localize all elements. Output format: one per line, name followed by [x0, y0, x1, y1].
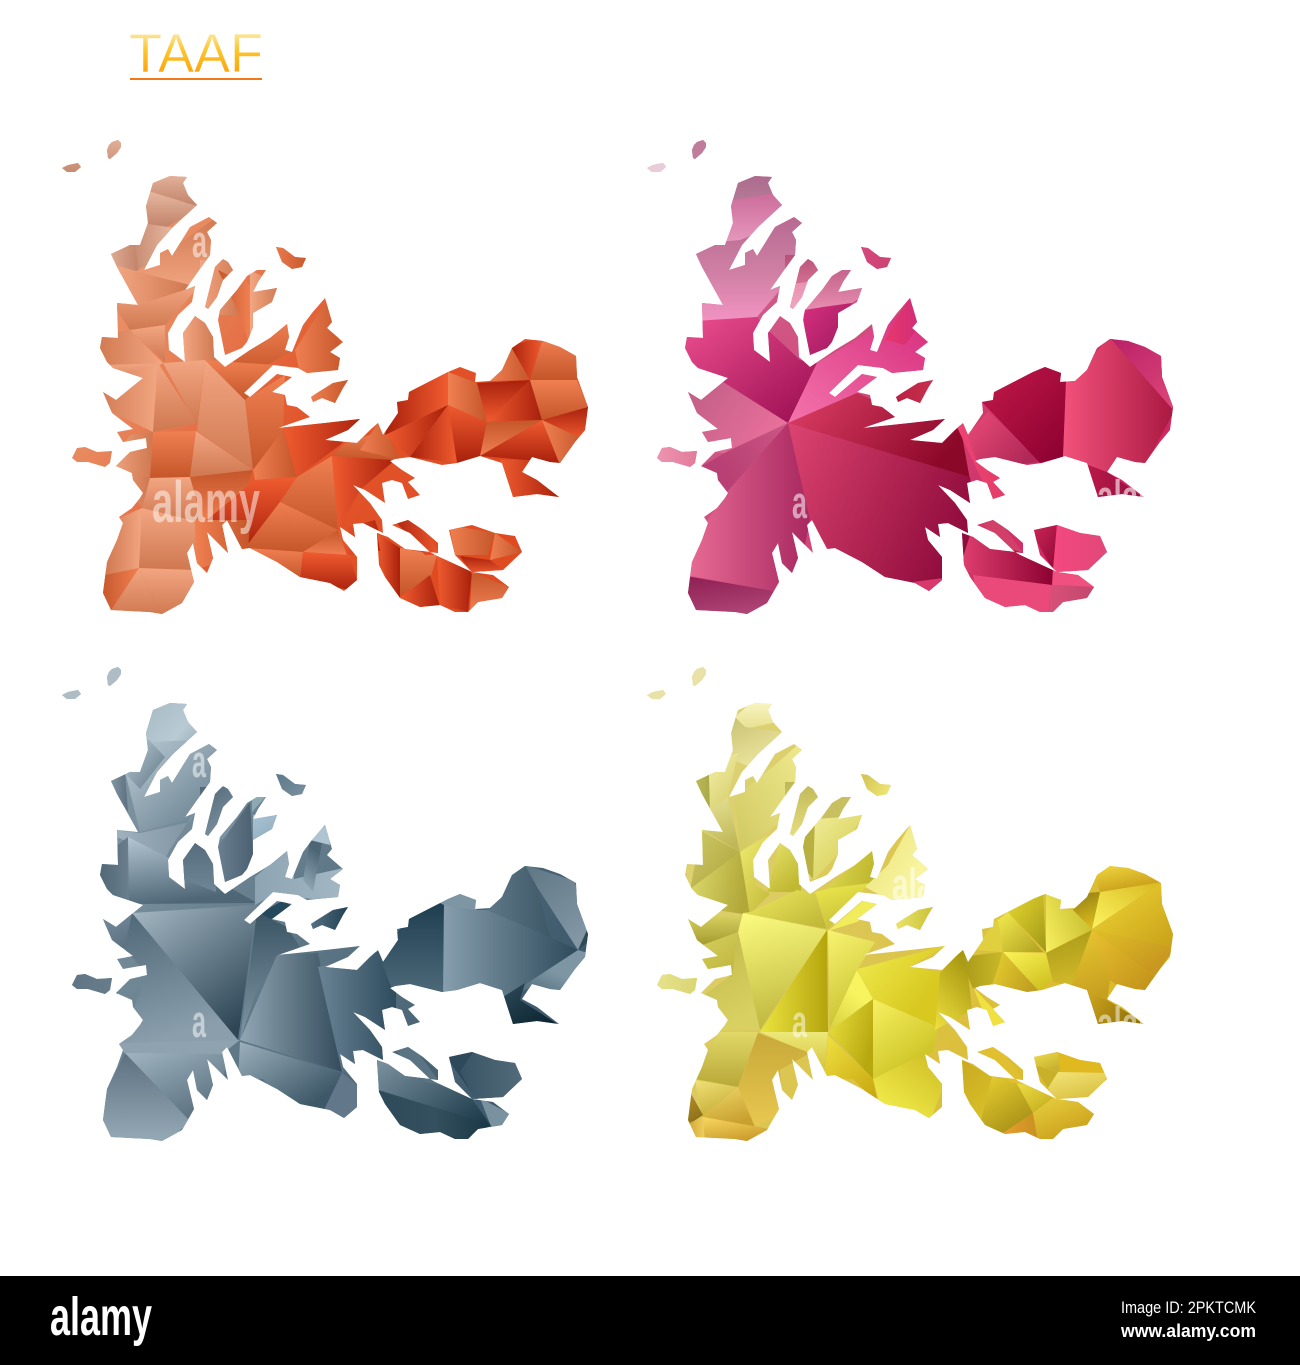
title: TAAF — [129, 22, 263, 84]
map: yellow low-poly: alamy — [1097, 998, 1181, 1049]
map: orange low-poly: a — [192, 216, 208, 267]
footer bar — [0, 1276, 1300, 1365]
website: www.alamy.com — [1120, 1321, 1256, 1341]
map: yellow low-poly: a — [792, 996, 808, 1047]
map: slate blue low-poly: a — [192, 996, 207, 1047]
map: yellow low-poly: alamy — [892, 859, 976, 910]
map: slate blue low-poly: a — [192, 736, 207, 787]
map: yellow low-poly — [635, 657, 1185, 1157]
map: orange low-poly — [50, 130, 600, 630]
map: pink low-poly: alamy — [1097, 471, 1181, 522]
footer logo: alamy — [50, 1287, 152, 1347]
map: pink low-poly: a — [792, 477, 808, 528]
watermark: alamy — [152, 470, 260, 535]
map: slate blue low-poly — [50, 657, 600, 1157]
map: pink low-poly — [635, 130, 1185, 630]
image id: Image ID: 2PKTCMK — [1121, 1298, 1257, 1317]
